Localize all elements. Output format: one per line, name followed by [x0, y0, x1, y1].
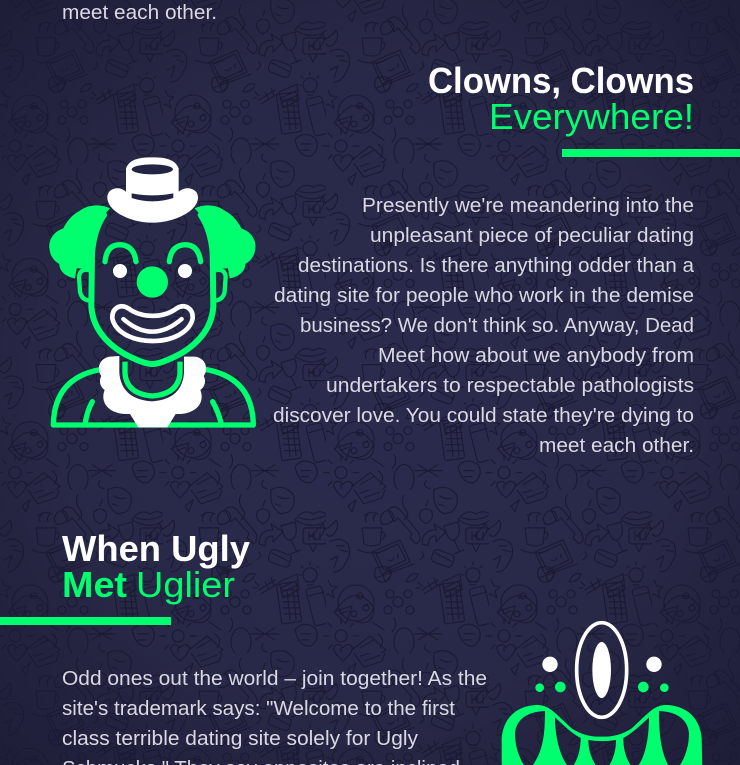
- icon: clown: [49, 157, 255, 427]
- clown hair: [49, 205, 255, 278]
- clown eyes and nose: [113, 264, 192, 298]
- text block: clowns paragraph: Presently we're meandering into the: [362, 195, 694, 217]
- text block: clowns paragraph: undertakers to respectable pathologists: [326, 375, 694, 397]
- heading: When Ugly Met Uglier: [62, 528, 250, 605]
- text block: ugly paragraph: Odd ones out the world – join together! As the: [62, 668, 487, 690]
- clown face outline and ears: [79, 215, 226, 364]
- heading: Clowns, Clowns Everywhere!: Clowns, Clowns: [428, 60, 694, 101]
- text block: ugly paragraph: [62, 668, 487, 765]
- clown shoulders: [53, 369, 253, 425]
- text block: clowns paragraph: meet each other.: [539, 435, 694, 457]
- heading: When Ugly Met Uglier: Met: [62, 564, 127, 605]
- accent bar: clowns heading: [562, 149, 740, 157]
- text block: clowns paragraph: Meet how about we anybody from: [378, 345, 694, 367]
- text block: ugly paragraph: site's trademark says: "Welcome to the first: [62, 698, 455, 720]
- clown hat: [107, 157, 198, 223]
- text block: ugly paragraph: class terrible dating site solely for Ugly: [62, 728, 418, 750]
- text block: clowns paragraph: [273, 195, 695, 457]
- text block: clowns paragraph: discover love. You could state they're dying to: [273, 405, 694, 427]
- text block: end of previous section: meet each other.: [62, 2, 217, 24]
- clown neck: [125, 362, 180, 396]
- text block: clowns paragraph: destinations. Is there anything odder than a: [298, 255, 695, 277]
- heading: Clowns, Clowns Everywhere!: [428, 60, 694, 137]
- text block: clowns paragraph: dating site for people who work in the demise: [274, 285, 694, 307]
- text block: clowns paragraph: unpleasant piece of peculiar dating: [370, 225, 694, 247]
- text block: clowns paragraph: business? We don't think so. Anyway, Dead: [300, 315, 694, 337]
- monster dots: [535, 657, 669, 692]
- heading: When Ugly Met Uglier: When Ugly: [62, 528, 250, 569]
- monster eye: [577, 623, 627, 717]
- clown mouth: [112, 306, 193, 341]
- clown ruff collar: [99, 356, 206, 427]
- icon: one-eyed monster: [502, 623, 702, 765]
- accent bar: ugly heading: [0, 617, 171, 625]
- heading: When Ugly Met Uglier: Uglier: [136, 564, 235, 605]
- heading: Clowns, Clowns Everywhere!: Everywhere!: [489, 96, 694, 137]
- monster body: [502, 705, 702, 765]
